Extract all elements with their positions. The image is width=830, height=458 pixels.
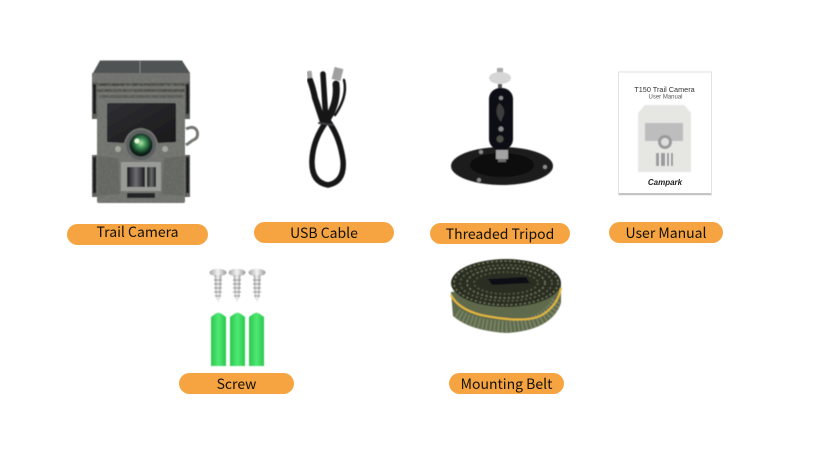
label: Trail Camera xyxy=(67,224,208,245)
manual title: T150 Trail Camera xyxy=(634,85,696,94)
icon: user manual xyxy=(618,72,712,195)
icon: trail camera xyxy=(92,60,198,203)
label: Screw xyxy=(179,373,294,394)
label: Trail Camera: Trail Camera xyxy=(96,222,179,242)
label: USB Cable: USB Cable xyxy=(290,223,358,243)
icon: green wall anchors xyxy=(211,312,264,366)
manual camera picture xyxy=(638,105,691,172)
icon: USB cable xyxy=(309,68,345,185)
label: Screw: Screw xyxy=(217,374,256,394)
label: Threaded Tripod: Threaded Tripod xyxy=(446,224,554,244)
manual logo: Campark xyxy=(648,178,683,187)
label: User Manual: User Manual xyxy=(625,223,707,243)
icon: mounting belt xyxy=(451,259,561,333)
manual subtitle: User Manual xyxy=(648,94,683,100)
label: USB Cable xyxy=(254,222,394,243)
icon: threaded tripod xyxy=(451,68,553,185)
icon: screws xyxy=(210,269,266,303)
label: User Manual xyxy=(609,222,723,243)
label: Mounting Belt: Mounting Belt xyxy=(461,374,552,394)
